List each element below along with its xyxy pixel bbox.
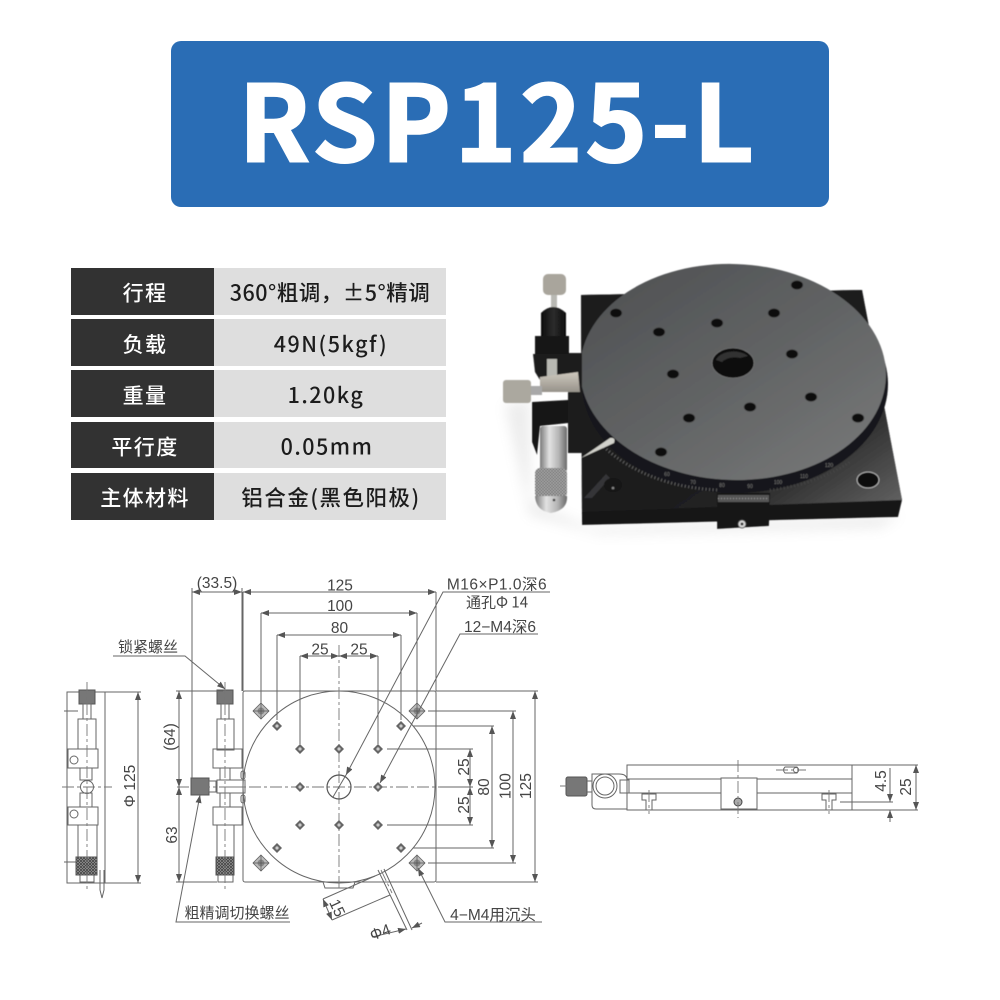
- scale numbers: 90: [747, 484, 753, 490]
- product photo: rotation stage: [503, 259, 902, 534]
- right dimensions: 80: [476, 778, 493, 796]
- micrometer assembly: [503, 274, 582, 513]
- rotating disc top: [576, 259, 890, 485]
- row: travel: 360°粗调，±5°精调: [230, 276, 430, 308]
- top dimensions: 25: [350, 642, 368, 658]
- row: parallelism: 0.05mm: [281, 430, 373, 462]
- barrel: [540, 426, 567, 472]
- callout: M16 thread: M16×P1.0深6: [447, 576, 547, 594]
- scale numbers: [664, 463, 833, 490]
- row: load: 49N(5kgf): [274, 328, 388, 359]
- dimension: 25 and 4.5: [830, 765, 918, 822]
- pointer pin with dimensions 15 and phi 4: 15: [325, 897, 348, 920]
- centre lines: [228, 645, 442, 888]
- upper blocks: [535, 336, 569, 357]
- end cap: [535, 496, 567, 513]
- label: lock screw: [113, 636, 225, 689]
- dimension: 33.5: (33.5): [197, 575, 237, 592]
- row: weight: 重量: [123, 380, 167, 410]
- callout: M16 thread: [333, 576, 550, 797]
- callout: 4-M4 counterbore: 4−M4用沉头: [450, 906, 536, 924]
- lower block: [532, 400, 568, 455]
- right dimensions: 25: [456, 758, 473, 776]
- top dimensions: 25: [311, 642, 329, 658]
- dimension: phi 125: [105, 692, 141, 883]
- label: lock screw: 锁紧螺丝: [118, 636, 178, 657]
- technical drawing: side elevation: [560, 760, 918, 822]
- corner counterbore holes: [253, 703, 425, 871]
- bottom clamp: [717, 493, 770, 529]
- dimension: 33.5: [192, 575, 242, 778]
- scale numbers: 80: [719, 483, 725, 489]
- dimension: phi 125: Φ 125: [122, 765, 139, 807]
- plate outline: [243, 691, 436, 882]
- black cylinder: [541, 307, 566, 336]
- row: load: [71, 319, 446, 366]
- row: parallelism: 平行度: [111, 432, 179, 462]
- scale numbers: 100: [774, 480, 782, 486]
- scale numbers: 120: [825, 463, 833, 469]
- top knob and stem: [551, 292, 557, 308]
- callout: 4-M4 counterbore: [418, 868, 542, 924]
- dimension: 64 and 63: (64): [162, 723, 179, 751]
- scale numbers: 70: [690, 480, 696, 486]
- back panel: [568, 353, 582, 453]
- shadow: [505, 400, 900, 534]
- pointer pin: [581, 438, 614, 458]
- right dimensions: 125: [518, 773, 535, 799]
- row: parallelism: [71, 422, 446, 468]
- top dimensions: [243, 578, 436, 744]
- row: travel: [71, 268, 446, 315]
- left knob and stem: [527, 386, 542, 395]
- dimension: 25 and 4.5: 25: [898, 778, 915, 796]
- twelve M4 holes: [272, 721, 406, 853]
- disc outline: [243, 691, 435, 883]
- scale numbers: 60: [664, 472, 670, 478]
- scale numbers: 110: [800, 474, 808, 480]
- pointer pin with dimensions 15 and phi 4: Φ4: [368, 921, 394, 944]
- right dimensions: 25: [456, 796, 473, 814]
- top dimensions: 100: [327, 598, 353, 615]
- centre hole: [327, 775, 351, 799]
- callout: M16 thread: 通孔Φ 14: [466, 592, 528, 612]
- dimension: 64 and 63: [162, 691, 223, 882]
- pointer pin with dimensions 15 and phi 4: [323, 869, 422, 944]
- dimension: 25 and 4.5: 4.5: [873, 770, 890, 792]
- knurl: [535, 468, 567, 498]
- top dimensions: 125: [327, 578, 353, 594]
- technical drawing: main plan view: [228, 576, 550, 944]
- nickel slide bar: [540, 372, 580, 392]
- technical drawing: left side view: [62, 682, 141, 898]
- row: weight: [71, 370, 446, 417]
- row: travel: 行程: [123, 278, 167, 308]
- right dimensions: [387, 691, 538, 882]
- callout: 12-M4: 12−M4深6: [464, 618, 536, 636]
- technical drawing: micrometer in top view: [113, 575, 290, 923]
- callout: 12-M4: [380, 618, 538, 783]
- specification table: [71, 268, 446, 520]
- row: weight: 1.20kg: [288, 379, 364, 410]
- title banner: [171, 40, 829, 207]
- row: body material: [71, 473, 446, 520]
- dimension: 64 and 63: 63: [164, 826, 181, 844]
- row: body material: 主体材料: [100, 482, 190, 512]
- right dimensions: 100: [498, 773, 514, 799]
- label: coarse-fine switch screw: 粗精调切换螺丝: [184, 902, 290, 923]
- label: coarse-fine switch screw: [176, 795, 290, 923]
- centre hole: [712, 348, 754, 378]
- rotating disc side and scale: [582, 275, 888, 493]
- mounting holes: [610, 280, 864, 456]
- row: load: 负载: [123, 329, 167, 359]
- top dimensions: 80: [331, 620, 348, 637]
- row: body material: 铝合金(黑色阳极): [241, 482, 421, 512]
- title text: RSP125-L: [239, 40, 757, 192]
- base plate: [581, 290, 902, 525]
